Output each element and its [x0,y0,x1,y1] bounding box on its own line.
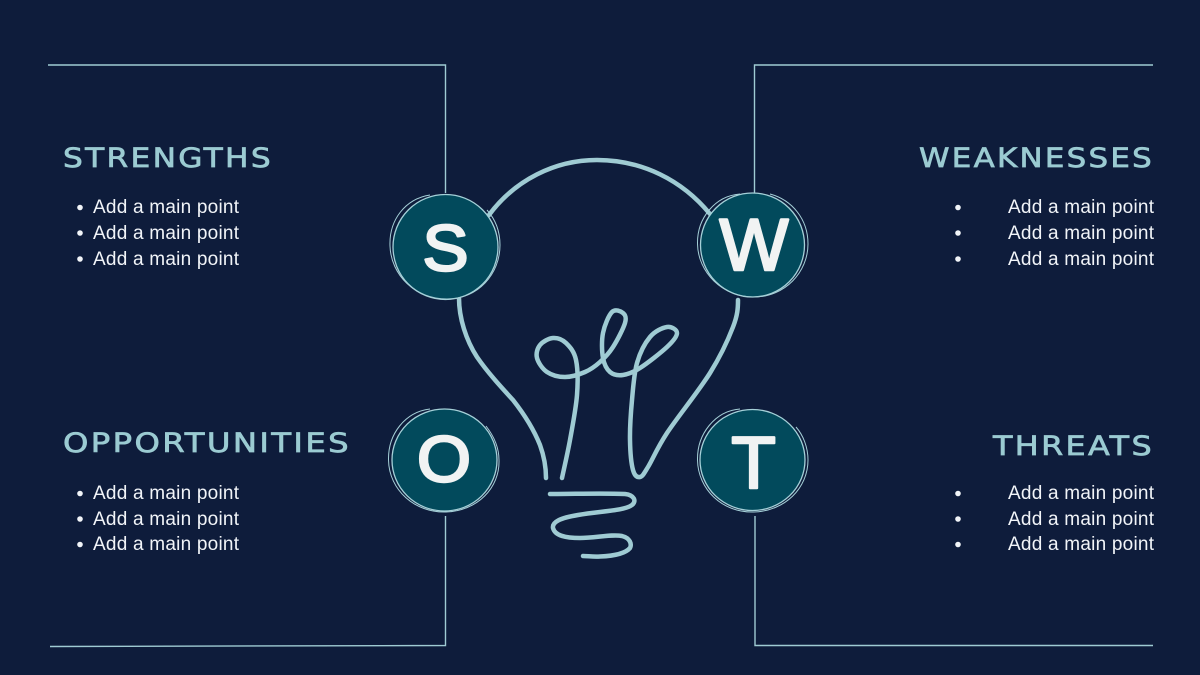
bullet list: weaknesses: Add a main point [1008,223,1155,244]
frame: bottom left [50,516,446,646]
panel: threats [955,431,1155,555]
badge: O [388,409,499,512]
heading: strengths: STRENGTHS [63,143,273,174]
letter T: T [731,423,776,504]
bullet list: opportunities: Add a main point [93,509,240,530]
frame: top right [754,65,1153,193]
bullet list: weaknesses: Add a main point [1008,249,1155,270]
frame: bottom right [755,516,1153,646]
letter W: W [720,205,789,286]
heading: threats: THREATS [992,431,1154,462]
bullet list: threats [955,483,1155,555]
bullet list: threats: Add a main point [1008,483,1155,504]
badge: S [390,194,500,300]
bulb top arc [489,160,710,215]
bulb base squiggle [550,494,634,557]
bullet list: opportunities [77,483,240,555]
letter O: O [417,422,471,496]
bullet list: threats: Add a main point [1008,534,1155,555]
bullet list: strengths: Add a main point [93,249,240,270]
bullet list: strengths [77,197,240,270]
bullet list: threats: Add a main point [1008,509,1155,530]
heading: weaknesses: WEAKNESSES [919,143,1154,174]
bullet list: weaknesses [955,197,1155,270]
frame: top left [48,65,446,193]
bulb left side [459,298,546,478]
bullet list: opportunities: Add a main point [93,534,240,555]
heading: opportunities: OPPORTUNITIES [63,428,351,459]
panel: opportunities [63,428,351,555]
filament and bulb right side [537,300,738,478]
bullet list: weaknesses: Add a main point [1008,197,1155,218]
panel: strengths [63,143,273,270]
badge: T [697,409,808,512]
panel: weaknesses [919,143,1155,270]
icon: hand-drawn light bulb [459,160,738,557]
bullet list: strengths: Add a main point [93,223,240,244]
bullet list: opportunities: Add a main point [93,483,240,504]
letter S: S [422,212,468,284]
bullet list: strengths: Add a main point [93,197,240,218]
badge: W [697,193,808,297]
